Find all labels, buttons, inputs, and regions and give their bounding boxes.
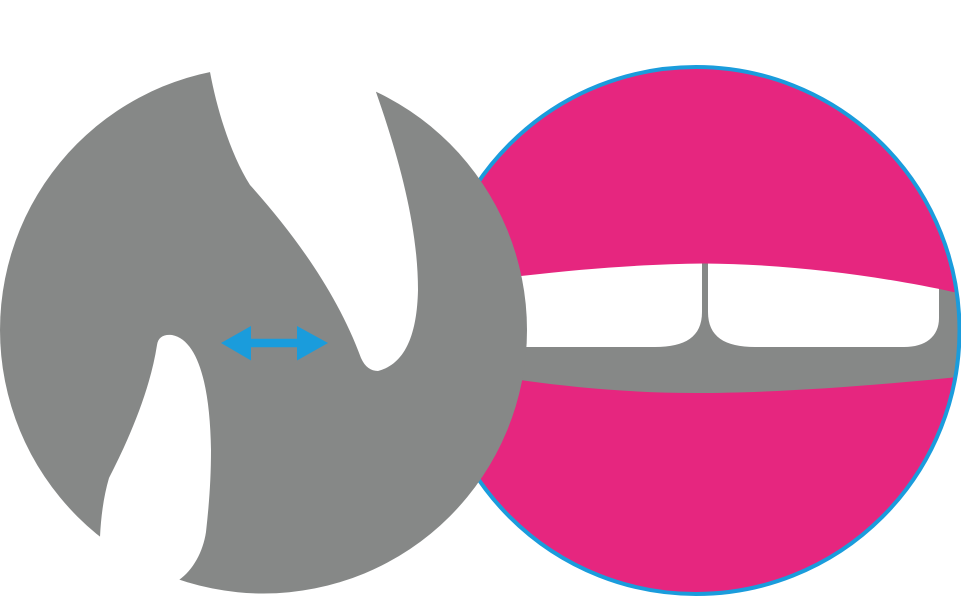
pink lips disc bbox=[432, 67, 960, 594]
icon: blue double arrow bbox=[221, 326, 328, 360]
panel: front view circle bbox=[432, 67, 961, 594]
gray side disc bbox=[0, 66, 527, 594]
left front tooth bbox=[521, 264, 702, 347]
gray mouth band bbox=[522, 264, 958, 393]
upper lip edge bbox=[514, 250, 955, 292]
lower tooth cutout bbox=[95, 335, 211, 600]
right front tooth bbox=[708, 264, 939, 347]
panel: side view circle bbox=[0, 50, 527, 600]
upper tooth cutout bbox=[209, 50, 418, 371]
mouth opening bbox=[521, 264, 958, 393]
blue circle outline bbox=[432, 67, 960, 594]
